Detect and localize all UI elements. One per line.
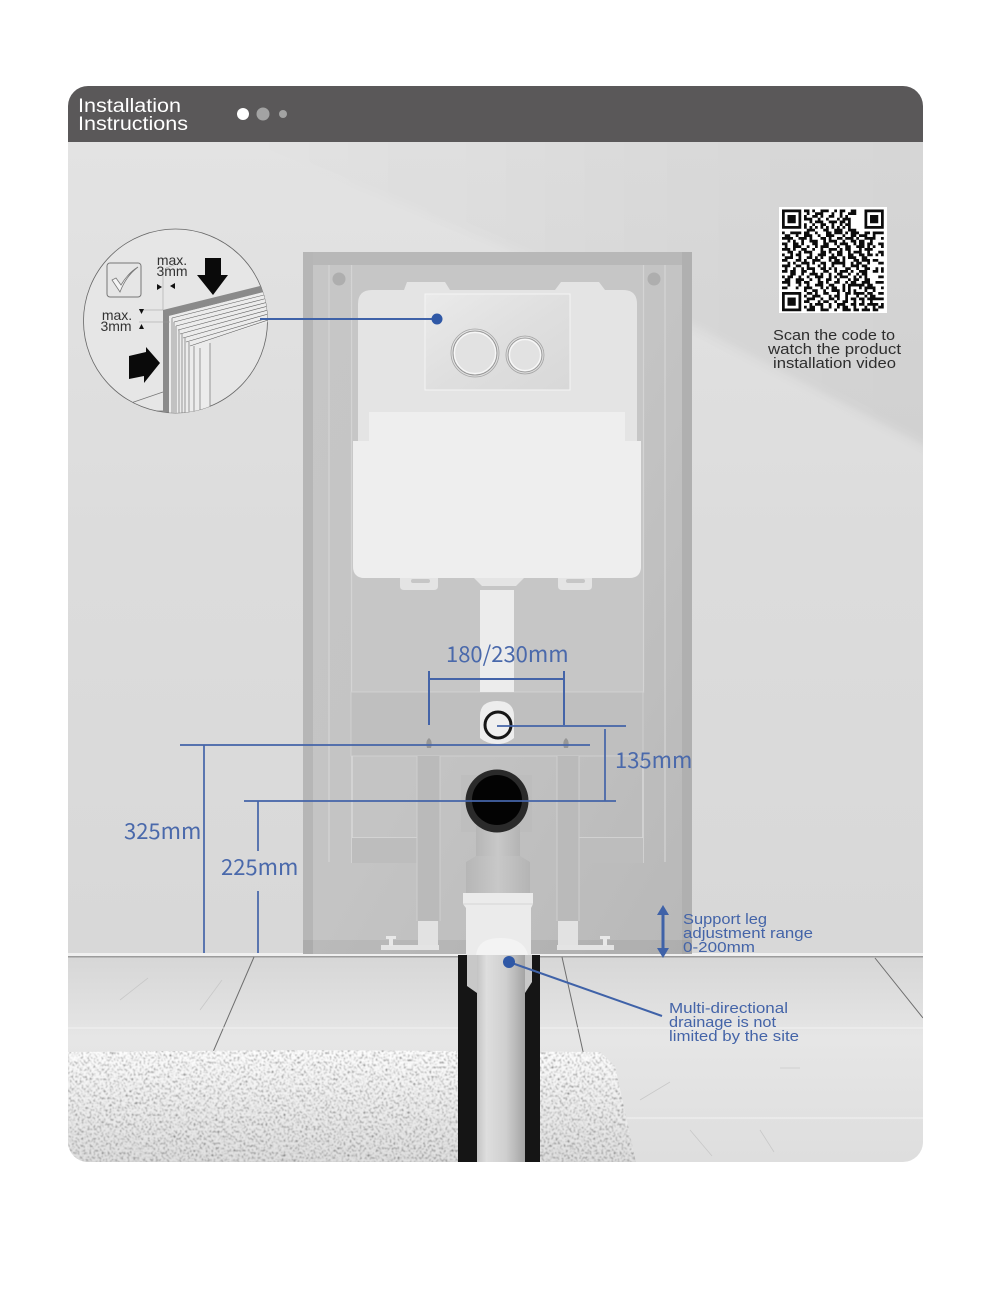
QR code xyxy=(779,207,887,313)
drain pipe through floor xyxy=(458,955,540,1162)
inset labels: 3mm xyxy=(100,318,132,334)
title: Instructions xyxy=(78,114,188,135)
waste pipe and black outlet xyxy=(461,770,533,955)
drainage label xyxy=(669,1000,799,1045)
dimension: 325mm xyxy=(124,745,590,953)
inset labels xyxy=(100,252,188,334)
dimension: 135mm xyxy=(497,726,692,801)
callout: frame corner leader xyxy=(260,314,442,324)
support leg label: 0-200mm xyxy=(683,939,755,956)
dimension: 135mm: 135mm xyxy=(615,743,692,775)
flush plate xyxy=(425,294,570,390)
icon: down arrow xyxy=(197,258,228,295)
title: Installation xyxy=(78,96,181,117)
icon: gap marks xyxy=(139,283,175,329)
support legs and feet xyxy=(381,738,614,950)
icon: right arrow xyxy=(129,347,160,383)
dimension: 180/230mm xyxy=(429,637,569,725)
icon: support leg range arrow xyxy=(657,905,669,958)
drainage label: Multi-directional xyxy=(669,1000,788,1017)
detail inset circle xyxy=(84,229,268,420)
shag carpet xyxy=(68,1050,638,1162)
inset labels: max. xyxy=(157,252,187,268)
QR caption: installation video xyxy=(773,355,896,372)
cistern tank xyxy=(353,282,641,692)
support leg label: adjustment range xyxy=(683,925,813,942)
dimension: 225mm xyxy=(221,801,616,953)
header bar xyxy=(68,86,923,142)
infographic canvas xyxy=(68,86,923,1162)
tiled floor xyxy=(68,953,923,1162)
pagination dots xyxy=(237,108,287,120)
dimension: 180/230mm: 180/230mm xyxy=(446,637,569,669)
mounting frame xyxy=(303,252,692,954)
support leg label xyxy=(683,911,813,956)
support leg label: Support leg xyxy=(683,911,767,928)
drainage label: limited by the site xyxy=(669,1028,799,1045)
inset labels: max. xyxy=(102,307,132,323)
inset labels: 3mm xyxy=(156,263,188,279)
dimension: 325mm: 325mm xyxy=(124,814,201,846)
QR caption: Scan the code to xyxy=(773,327,895,344)
flush pipe fitting xyxy=(480,701,514,744)
QR caption: watch the product xyxy=(767,341,902,358)
title xyxy=(78,96,188,135)
icon: checkmark box xyxy=(107,263,141,297)
drainage label: drainage is not xyxy=(669,1014,777,1031)
product photo panel xyxy=(68,142,923,1162)
callout: drainage leader xyxy=(503,956,662,1016)
QR caption xyxy=(767,327,902,372)
dimension: 225mm: 225mm xyxy=(221,850,298,882)
wall background xyxy=(68,142,923,953)
